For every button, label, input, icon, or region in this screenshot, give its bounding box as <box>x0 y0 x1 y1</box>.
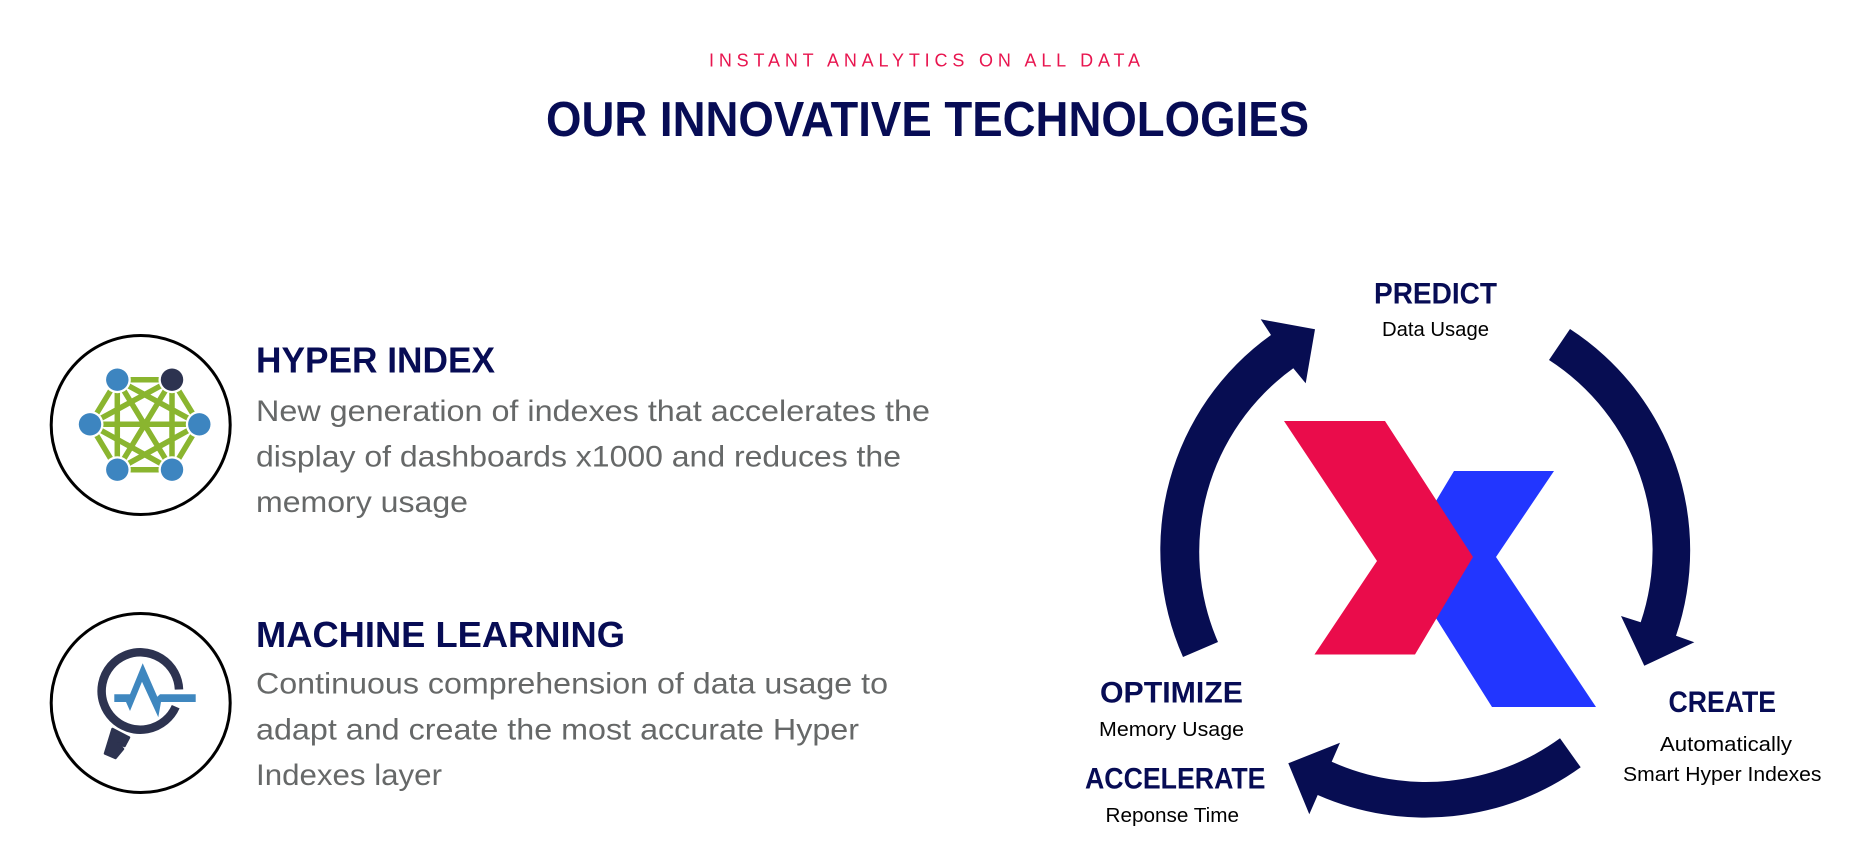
panel: machine learning <box>51 614 888 792</box>
text block: machine learning description: adapt and create the most accurate Hyper <box>256 714 859 746</box>
label: optimize: Memory Usage <box>1099 718 1244 741</box>
label: accelerate: ACCELERATE <box>1085 762 1266 796</box>
heading: machine learning: MACHINE LEARNING <box>256 614 625 655</box>
label: accelerate <box>1085 762 1266 827</box>
arrow: optimize to predict <box>1160 319 1315 657</box>
arrow: predict to create <box>1549 329 1694 666</box>
eyebrow text: INSTANT ANALYTICS ON ALL DATA <box>709 50 1140 70</box>
text block: machine learning description: Indexes layer <box>256 759 442 792</box>
label: optimize: OPTIMIZE <box>1100 676 1243 710</box>
logo <box>1284 421 1596 707</box>
diagram: cycle <box>1085 278 1822 827</box>
label: create: CREATE <box>1668 686 1776 719</box>
heading: hyper index: HYPER INDEX <box>256 340 495 380</box>
arrow: create to accelerate <box>1288 738 1581 818</box>
label: create: Automatically <box>1660 733 1793 756</box>
label: accelerate: Reponse Time <box>1106 804 1239 827</box>
label: create: Smart Hyper Indexes <box>1623 763 1822 786</box>
panel: hyper index <box>51 336 930 519</box>
text block: hyper index description: memory usage <box>256 486 468 519</box>
text block: machine learning description <box>256 668 888 792</box>
text block: hyper index description: New generation of indexes that accelerates the <box>256 395 930 428</box>
label: create <box>1623 686 1822 786</box>
label: predict <box>1374 278 1497 341</box>
icon: magnifier with pulse in circle <box>51 614 230 792</box>
text block: hyper index description: display of dashboards x1000 and reduces the <box>256 440 901 474</box>
label: optimize <box>1099 676 1244 741</box>
text block: machine learning description: Continuous comprehension of data usage to <box>256 668 888 700</box>
label: predict: PREDICT <box>1374 278 1497 310</box>
text block: hyper index description <box>256 395 930 519</box>
icon: network in circle <box>51 336 230 514</box>
title: OUR INNOVATIVE TECHNOLOGIES <box>546 93 1309 147</box>
label: predict: Data Usage <box>1382 318 1489 341</box>
